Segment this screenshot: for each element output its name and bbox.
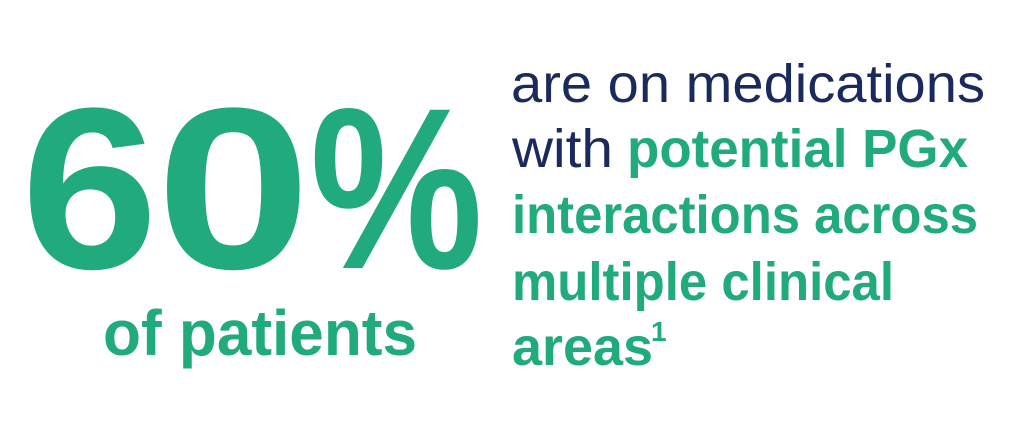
big statistic: 60% <box>21 60 483 317</box>
label: of patients: of patients <box>103 297 417 369</box>
big statistic: 60%: 6 <box>21 60 158 317</box>
description text block: multiple clinical <box>512 252 894 312</box>
description text block: with <box>511 119 613 179</box>
description text block: interactions across <box>512 185 978 245</box>
description text block: are on medications <box>511 54 985 114</box>
description text block: 1 <box>651 316 667 347</box>
big statistic: 60%: % <box>310 60 483 317</box>
description text block: potential PGx <box>627 119 968 179</box>
description text block <box>511 54 985 377</box>
description text block: areas <box>512 317 653 377</box>
big statistic: 60%: 0 <box>156 60 311 317</box>
